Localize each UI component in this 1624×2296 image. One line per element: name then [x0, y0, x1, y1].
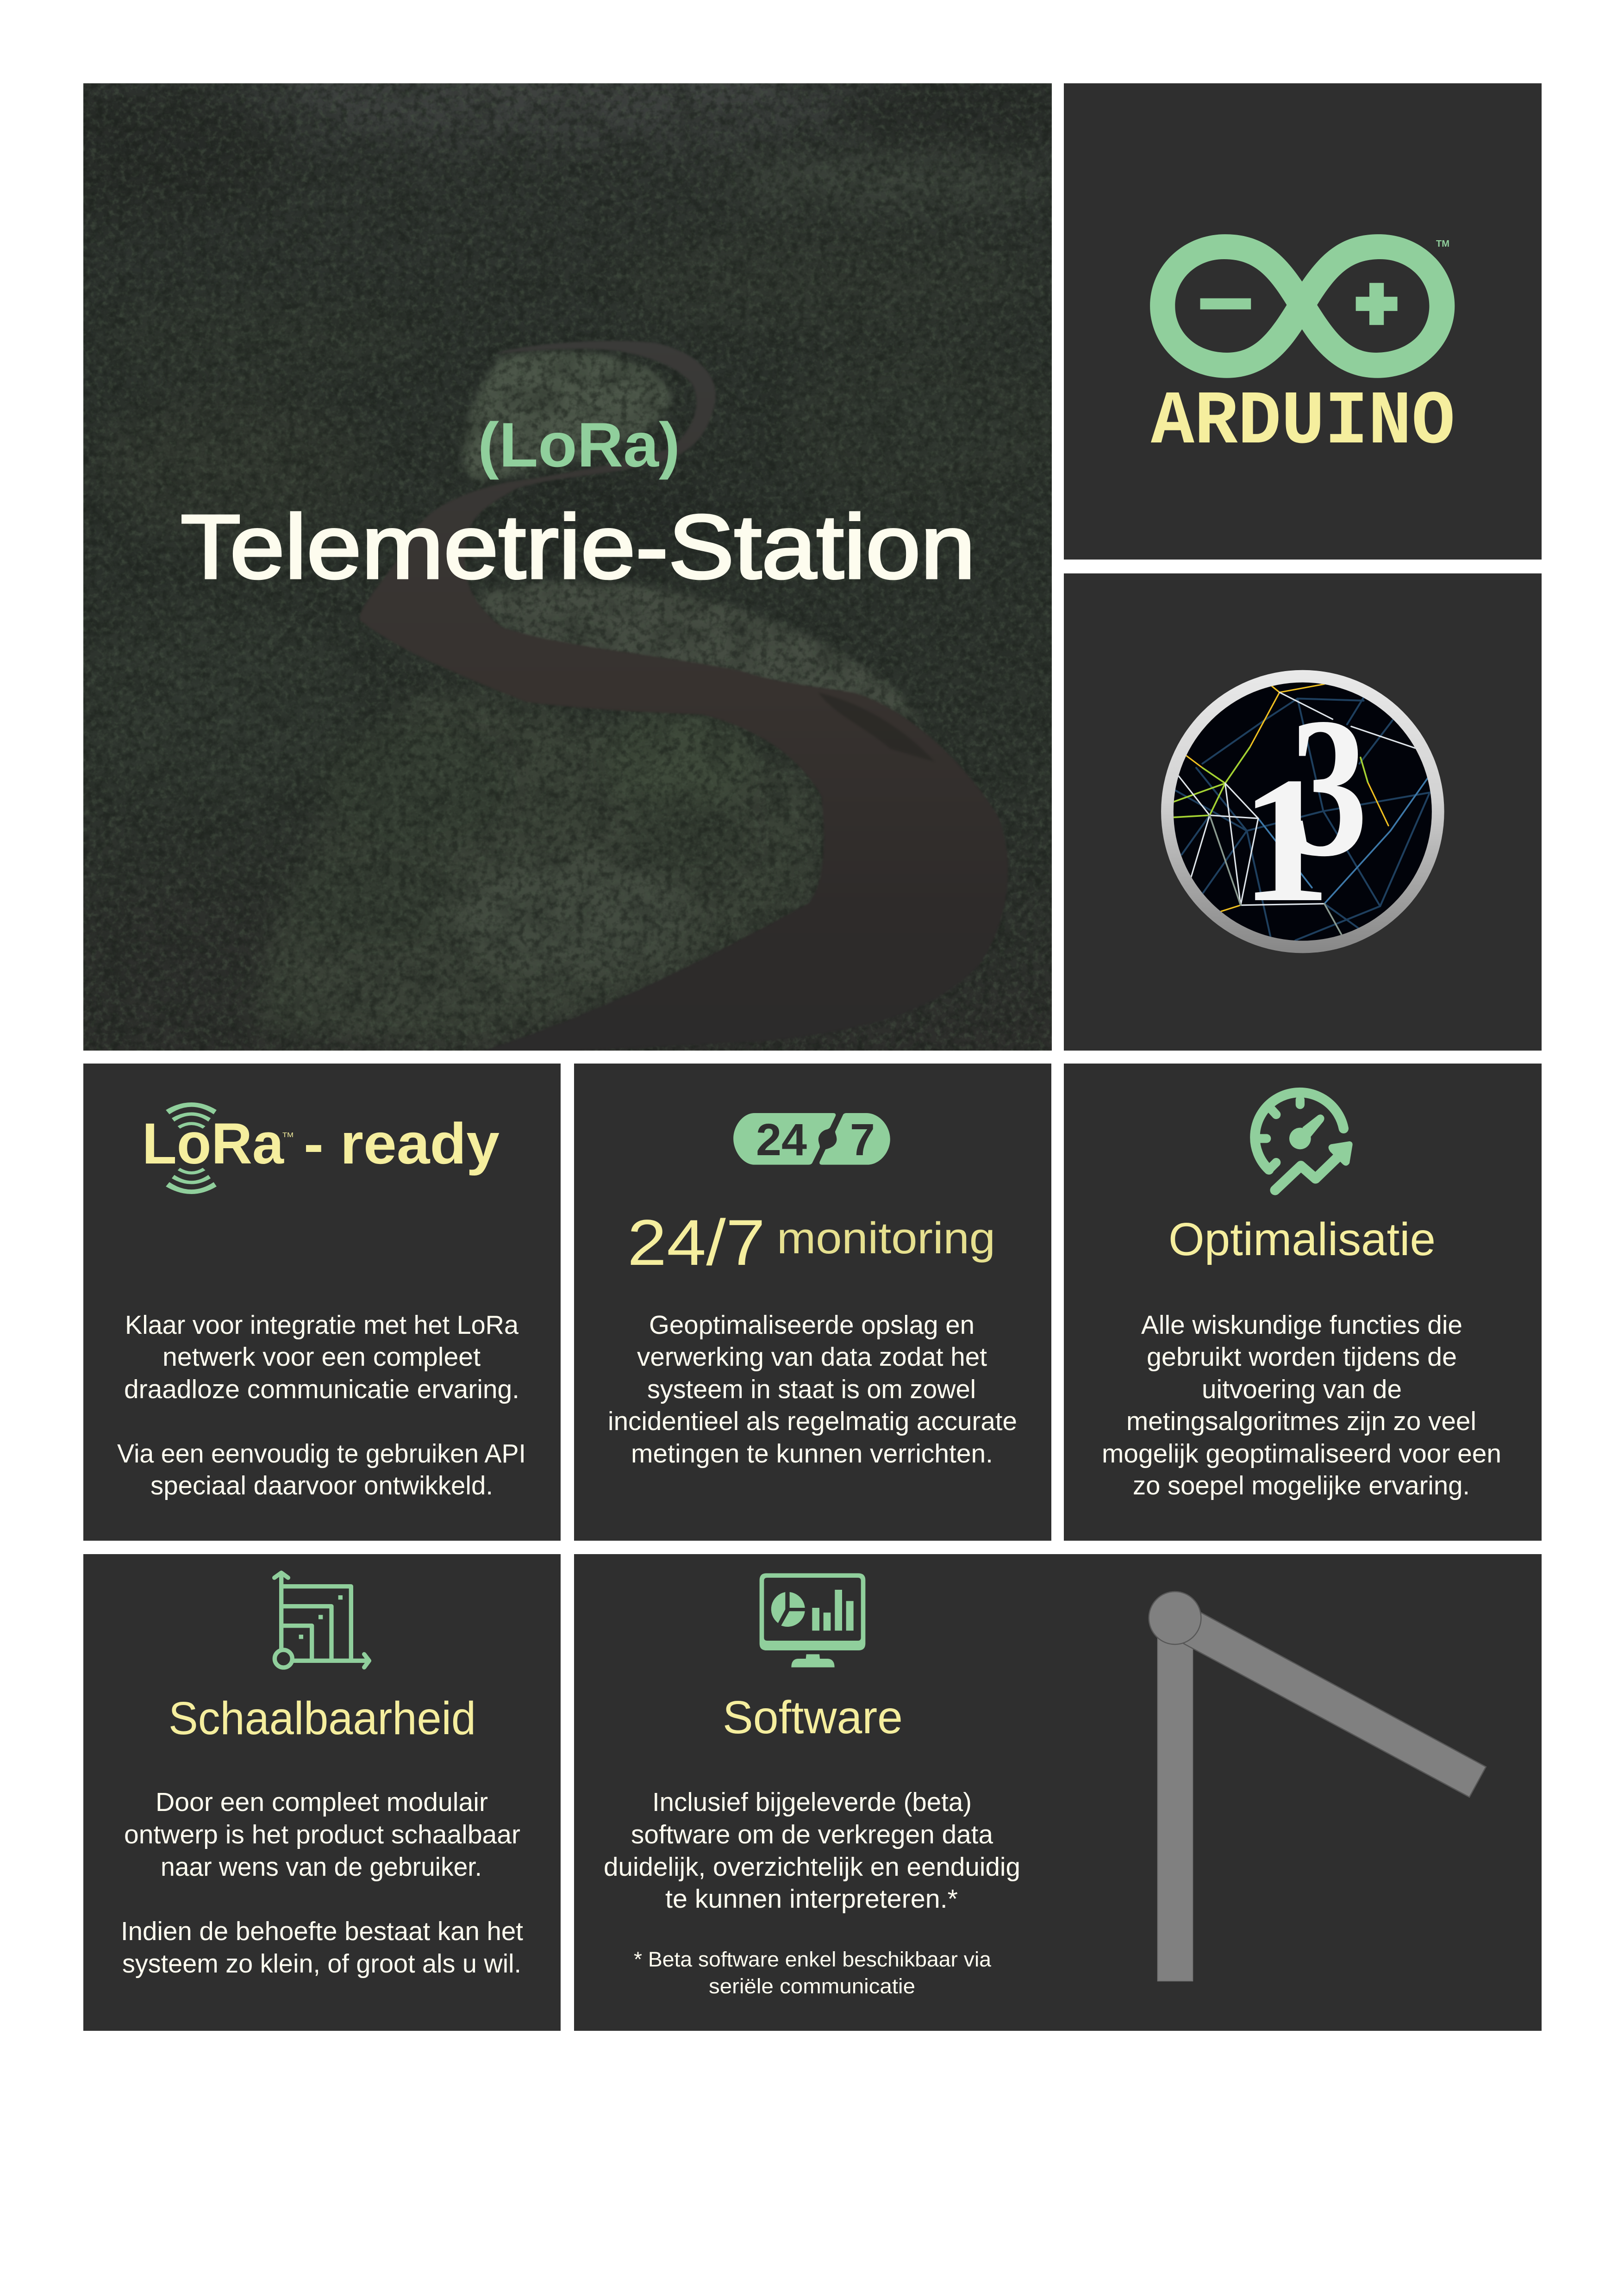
panel: LoRa ready: [83, 1064, 561, 1541]
body text: [121, 1787, 523, 1979]
panel: Optimalisatie: [1064, 1064, 1542, 1541]
body text: Alle wiskundige functies die: [1141, 1310, 1462, 1340]
body text: duidelijk, overzichtelijk en eenduidig: [604, 1852, 1020, 1882]
body text: systeem zo klein, of groot als u wil.: [122, 1949, 521, 1979]
body text: netwerk voor een compleet: [162, 1342, 481, 1372]
panel: Arduino logo: [1064, 83, 1542, 560]
icon: 24/7 badge: 24: [756, 1114, 807, 1165]
panel: Processing logo: [1064, 573, 1542, 1051]
body text: [117, 1310, 526, 1500]
body text: draadloze communicatie ervaring.: [124, 1375, 519, 1404]
body text: [1102, 1310, 1501, 1500]
body text: uitvoering van de: [1202, 1375, 1402, 1404]
icon: LoRa signal arcs: [166, 1102, 217, 1194]
heading: Software: Software: [723, 1692, 903, 1743]
heading: 24/7 monitoring: [627, 1206, 995, 1279]
panel: hero photo with title: [0, 49, 1104, 1066]
body text: speciaal daarvoor ontwikkeld.: [150, 1471, 493, 1500]
footnote: [634, 1948, 992, 1998]
body text: Indien de behoefte bestaat kan het: [121, 1916, 523, 1946]
icon: speedometer with rising arrow: [1255, 1093, 1353, 1190]
icon: 24/7 badge: [733, 1113, 890, 1165]
title: Telemetrie-Station: Telemetrie-Station: [181, 496, 975, 597]
processing glyph 3: 3: [1290, 676, 1368, 898]
body text: mogelijk geoptimaliseerd voor een: [1102, 1439, 1501, 1468]
trademark mark: TM: [282, 1131, 294, 1139]
logo text: LoRa: LoRa: [142, 1112, 284, 1176]
processing glyph 1: 1: [1241, 740, 1330, 940]
icon: monitor with charts: [760, 1573, 865, 1668]
panel: Software and sensor arm: [574, 1554, 1542, 2031]
trademark mark: TM: [1436, 239, 1449, 249]
body text: metingen te kunnen verrichten.: [631, 1439, 993, 1468]
heading: Optimalisatie: Optimalisatie: [1168, 1213, 1436, 1265]
icon: nested scaling squares on axes: [275, 1573, 369, 1668]
body text: incidentieel als regelmatig accurate: [608, 1406, 1017, 1436]
body text: zo soepel mogelijke ervaring.: [1133, 1471, 1470, 1500]
footnote: * Beta software enkel beschikbaar via: [634, 1948, 992, 1971]
wordmark: ARDUINO: ARDUINO: [1151, 380, 1455, 466]
subtitle: (LoRa): (LoRa): [478, 410, 680, 480]
body text: naar wens van de gebruiker.: [161, 1852, 482, 1882]
body text: verwerking van data zodat het: [637, 1342, 987, 1372]
body text: software om de verkregen data: [631, 1820, 993, 1849]
icon: Arduino infinity symbol: [1150, 234, 1455, 378]
footnote: seriële communicatie: [709, 1974, 915, 1998]
body text: ontwerp is het product schaalbaar: [124, 1820, 520, 1849]
body text: gebruikt worden tijdens de: [1147, 1342, 1457, 1372]
heading: 24/7 monitoring: 24/7: [627, 1206, 765, 1279]
body text: [604, 1787, 1020, 1914]
icon: Processing round badge: [1161, 670, 1444, 953]
illustration: gray station pole with arm: [1149, 1592, 1486, 1981]
panel: 24/7 monitoring: [574, 1064, 1051, 1541]
heading: - ready: - ready: [304, 1112, 500, 1176]
body text: [608, 1310, 1017, 1468]
panel: Schaalbaarheid: [83, 1554, 561, 2031]
heading: 24/7 monitoring: monitoring: [777, 1213, 995, 1263]
body text: metingsalgoritmes zijn zo veel: [1126, 1406, 1476, 1436]
icon: 24/7 badge: 7: [850, 1114, 875, 1165]
body text: Door een compleet modulair: [156, 1787, 488, 1817]
body text: systeem in staat is om zowel: [647, 1375, 976, 1404]
body text: Klaar voor integratie met het LoRa: [125, 1310, 518, 1340]
heading: Schaalbaarheid: Schaalbaarheid: [169, 1692, 476, 1744]
body text: Inclusief bijgeleverde (beta): [652, 1787, 972, 1817]
body text: Via een eenvoudig te gebruiken API: [117, 1439, 526, 1468]
photo: aerial river through forest: [0, 49, 1104, 1066]
body text: te kunnen interpreteren.*: [665, 1884, 958, 1914]
body text: Geoptimaliseerde opslag en: [649, 1310, 974, 1340]
